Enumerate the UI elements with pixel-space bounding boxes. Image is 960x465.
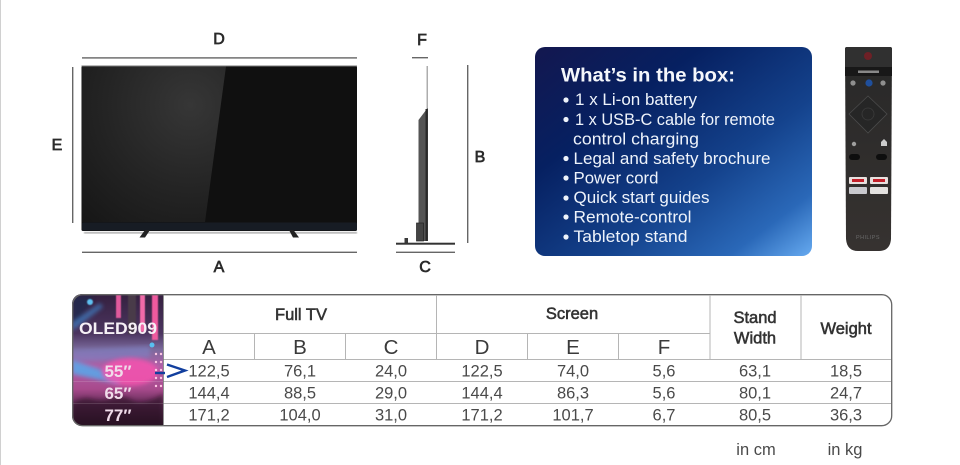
row 77: 171,2 — [461, 406, 503, 424]
box heading: What’s in the box: — [561, 64, 735, 86]
row 65: 5,6 — [653, 384, 675, 402]
column letters: A — [202, 336, 216, 359]
panel: what's in the box — [535, 47, 812, 256]
box list: control charging — [573, 130, 699, 148]
spec table: Screen — [546, 305, 598, 323]
box list: Tabletop stand — [574, 227, 688, 246]
row 55: 122,5 — [461, 362, 503, 380]
TV side — [396, 66, 455, 245]
row 65: 144,4 — [188, 384, 230, 402]
column letters: F — [658, 336, 670, 359]
row 77: 80,5 — [739, 406, 771, 424]
model name: OLED909 — [79, 319, 157, 338]
dimension line E — [72, 67, 73, 223]
icon: remote control: PHILIPS — [856, 235, 880, 241]
size labels: 65″ — [104, 384, 132, 403]
column letters: D — [475, 336, 489, 359]
box list: Power cord — [574, 168, 658, 188]
spec table: Width — [734, 330, 776, 348]
page edge lines — [0, 0, 1, 465]
row 65: 80,1 — [739, 384, 771, 402]
row 55: 24,0 — [375, 362, 407, 380]
row 77: 36,3 — [830, 406, 862, 424]
box list — [563, 90, 775, 246]
label D: D — [213, 31, 225, 48]
dimension line B — [467, 65, 468, 243]
spec table — [72, 294, 892, 426]
row 65: 144,4 — [461, 384, 503, 402]
box list: 1 x Li-on battery — [575, 90, 698, 109]
row 55: 76,1 — [284, 362, 316, 380]
row 65: 29,0 — [375, 384, 407, 402]
table frame — [73, 295, 892, 426]
row 77: 171,2 — [188, 406, 230, 424]
box list: Legal and safety brochure — [574, 149, 770, 168]
row 65 — [188, 384, 862, 402]
table headers: Full TV — [275, 306, 327, 324]
column letters: C — [384, 336, 399, 359]
label E: E — [52, 137, 62, 154]
box list: Quick start guides — [574, 188, 710, 207]
row 55: 74,0 — [557, 362, 589, 380]
column letters: B — [293, 336, 307, 359]
row 55 — [188, 362, 862, 380]
spec table: Weight — [820, 320, 872, 338]
label A: A — [214, 259, 225, 276]
label B: B — [475, 149, 485, 166]
label F: F — [417, 32, 427, 49]
front view diagram — [52, 31, 357, 276]
row 55: 5,6 — [653, 362, 675, 380]
spec table: Stand — [733, 309, 777, 327]
arrow — [155, 364, 185, 377]
unit: cm: in cm — [736, 441, 776, 459]
TV front — [82, 66, 357, 238]
row 65: 88,5 — [284, 384, 316, 402]
row 55: 63,1 — [739, 362, 771, 380]
dimension line A — [82, 252, 357, 253]
row 55: 122,5 — [188, 362, 230, 380]
dimension line C — [396, 252, 455, 253]
row 77: 101,7 — [552, 406, 594, 424]
row 55: 18,5 — [830, 362, 862, 380]
row 77 — [188, 406, 862, 424]
row 65: 24,7 — [830, 384, 862, 402]
box list: 1 x USB-C cable for remote — [575, 110, 775, 129]
size labels — [104, 362, 132, 425]
table image panel — [72, 294, 163, 426]
size labels: 55″ — [104, 362, 132, 381]
column letters — [202, 336, 670, 359]
dimension line D — [82, 57, 357, 59]
dimension line F — [412, 57, 428, 58]
box list: Remote-control — [574, 208, 692, 226]
row 65: 86,3 — [557, 384, 589, 402]
row 77: 104,0 — [279, 406, 321, 424]
row 77: 31,0 — [375, 406, 407, 424]
unit: kg: in kg — [828, 441, 862, 459]
size labels: 77″ — [104, 406, 132, 425]
column letters: E — [566, 336, 580, 359]
label C: C — [419, 259, 431, 276]
table grid — [163, 295, 891, 404]
side view diagram — [396, 32, 485, 276]
row 77: 6,7 — [653, 406, 675, 424]
icon: remote control — [845, 47, 892, 251]
